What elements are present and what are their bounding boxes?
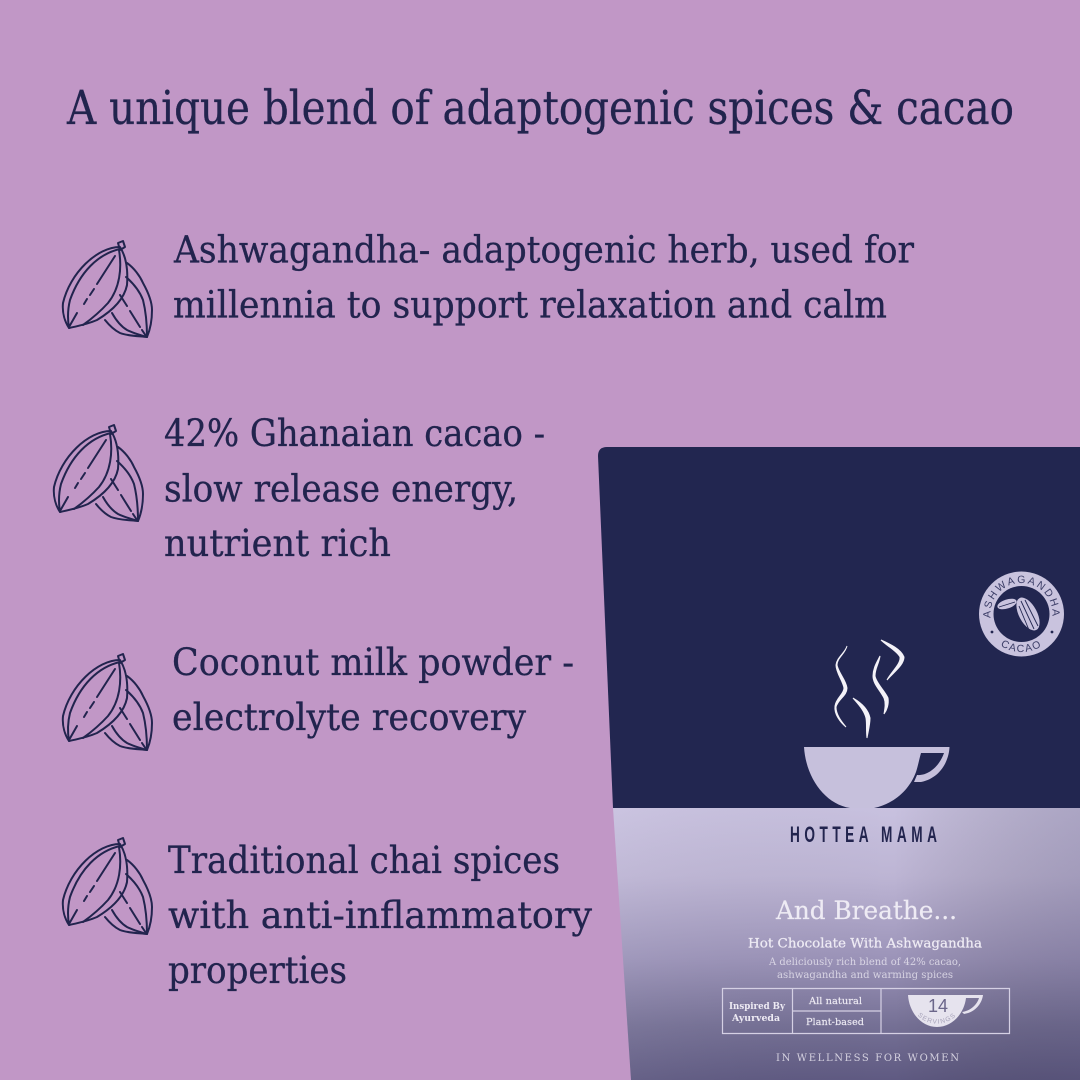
text: cacao description: 42% Ghanaian cacao - xyxy=(164,412,545,455)
item: ghanaian cacao xyxy=(54,412,545,565)
text: cacao description: slow release energy, xyxy=(164,468,518,510)
attributes table: All natural xyxy=(808,996,862,1007)
text: chai description: with anti-inflammatory xyxy=(168,894,592,937)
icon: servings cup: SERVINGS xyxy=(918,1012,955,1024)
icon: servings cup: 14 xyxy=(928,996,948,1016)
icon: servings cup xyxy=(908,995,983,1027)
text: ashwagandha description: Ashwagandha- adaptogenic herb, used for xyxy=(173,228,914,272)
text: chai description xyxy=(168,839,592,992)
item: chai spices xyxy=(63,838,592,992)
product subtitle: Hot Chocolate With Ashwagandha xyxy=(748,936,982,952)
badge: ashwagandha cacao xyxy=(979,572,1064,656)
product description: A deliciously rich blend of 42% cacao, xyxy=(768,956,961,968)
text: cacao description: nutrient rich xyxy=(164,522,391,565)
tagline: IN WELLNESS FOR WOMEN xyxy=(776,1053,959,1064)
text: cacao description xyxy=(164,412,545,565)
icon: cacao pods xyxy=(63,838,152,934)
product name: And Breathe... xyxy=(775,896,957,925)
brand: hottea mama: HOTTEA MAMA xyxy=(790,822,937,847)
item: coconut milk xyxy=(63,641,574,750)
attributes table xyxy=(722,988,1010,1034)
product pouch xyxy=(598,447,1080,1080)
icon: cacao pods xyxy=(54,425,143,521)
product description xyxy=(768,956,961,981)
product description: ashwagandha and warming spices xyxy=(777,969,953,981)
text: coconut description: electrolyte recovery xyxy=(172,696,526,739)
text: ashwagandha description xyxy=(173,228,914,326)
badge: ashwagandha cacao: CACAO xyxy=(1002,640,1040,652)
attributes table: Plant-based xyxy=(806,1017,864,1028)
pouch navy top xyxy=(598,447,1080,808)
icon: cup xyxy=(804,747,950,808)
text: coconut description xyxy=(172,641,574,739)
pouch lilac lower panel xyxy=(613,808,1080,1080)
text: ashwagandha description: millennia to support relaxation and calm xyxy=(173,284,887,326)
text: chai description: Traditional chai spices xyxy=(168,839,560,882)
icon: cacao pods xyxy=(63,654,152,750)
attributes table: Inspired By xyxy=(729,1001,785,1012)
text: chai description: properties xyxy=(168,949,347,992)
icon: cacao pods xyxy=(63,241,152,337)
badge: ashwagandha cacao: ASHWAGANDHA xyxy=(983,576,1060,618)
text: coconut description: Coconut milk powder - xyxy=(172,641,574,684)
attributes table: Ayurveda xyxy=(731,1013,780,1024)
icon: steam xyxy=(835,640,904,738)
item: ashwagandha xyxy=(63,228,914,337)
